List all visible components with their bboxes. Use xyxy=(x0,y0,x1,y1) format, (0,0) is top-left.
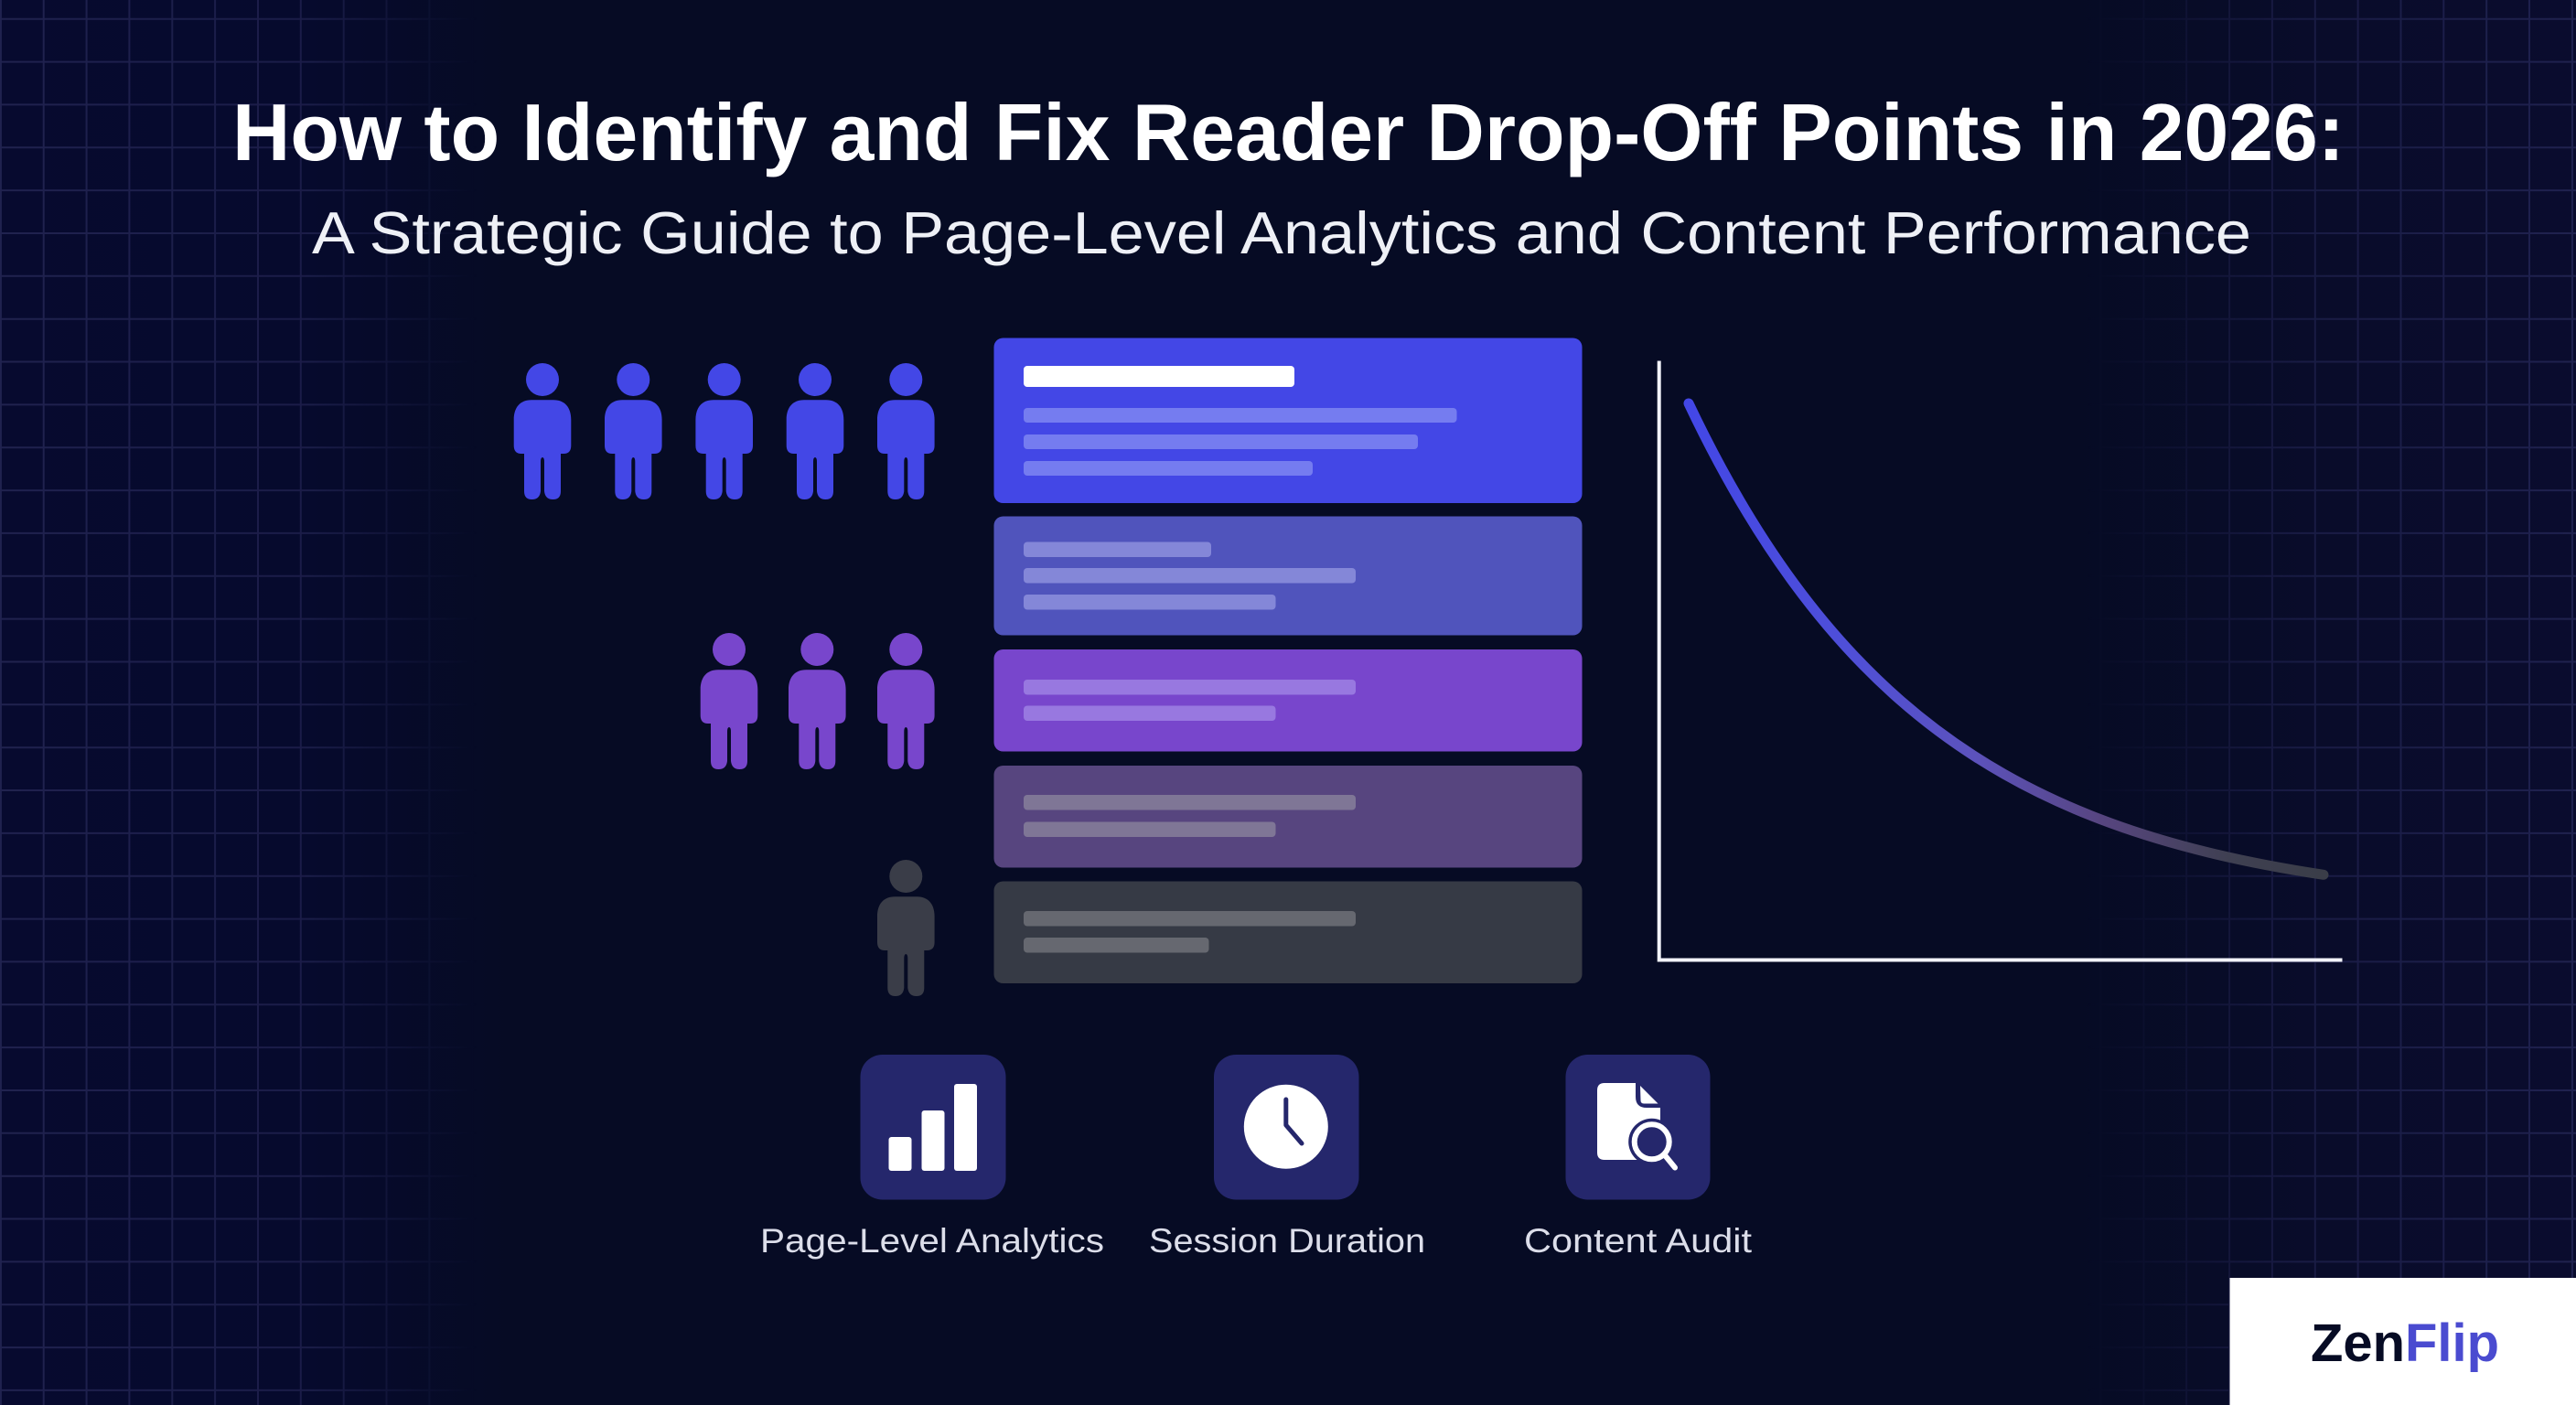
icon: person xyxy=(701,633,757,769)
panel: section 1 blue xyxy=(993,338,1583,503)
panel: section 3 purple xyxy=(993,649,1583,752)
logo badge: ZenFlip xyxy=(2230,1278,2576,1405)
chart: retention decay curve xyxy=(1659,360,2342,960)
icon: bar chart xyxy=(860,1055,1006,1200)
icon: person xyxy=(789,633,846,769)
icon: clock xyxy=(1214,1055,1359,1200)
icon: person xyxy=(514,363,571,499)
icon: document with magnifier xyxy=(1566,1055,1711,1200)
title: How to Identify and Fix Reader Drop-Off Points in 2026: xyxy=(232,87,2345,177)
icon: person xyxy=(877,363,935,499)
readers row: one grey person xyxy=(877,860,935,996)
panel: section 4 muted purple xyxy=(993,766,1583,867)
readers row: five blue people xyxy=(514,363,935,499)
feature: Page-Level Analytics xyxy=(760,1055,1104,1260)
label: Page-Level Analytics xyxy=(760,1222,1104,1260)
content stack xyxy=(993,338,1583,983)
icon: person xyxy=(605,363,662,499)
icon: person xyxy=(877,633,935,769)
label: Session Duration xyxy=(1149,1222,1425,1260)
label: Content Audit xyxy=(1524,1222,1753,1260)
feature: Content Audit xyxy=(1524,1055,1753,1260)
subtitle: A Strategic Guide to Page-Level Analytics and Content Performance xyxy=(312,199,2251,266)
readers row: three purple people xyxy=(701,633,935,769)
icon: person xyxy=(787,363,843,499)
icon: person xyxy=(695,363,753,499)
panel: section 5 grey xyxy=(993,882,1583,983)
chart axes xyxy=(1659,360,2342,960)
logo badge: ZenFlip: ZenFlip xyxy=(2311,1314,2499,1373)
chart curve xyxy=(1689,403,2324,874)
panel: section 2 muted indigo xyxy=(993,516,1583,635)
feature: Session Duration xyxy=(1149,1055,1425,1260)
